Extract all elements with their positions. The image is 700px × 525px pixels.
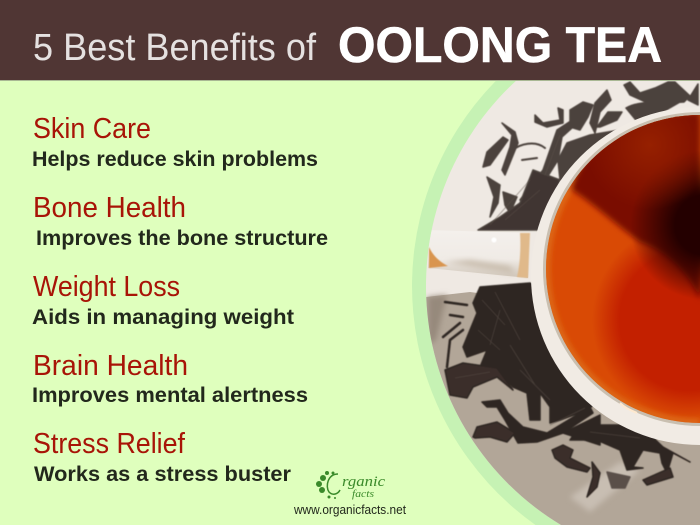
tea: red centre [598, 244, 700, 412]
inner wall shading [543, 112, 700, 426]
photo: tea cup on saucer with leaves [412, 81, 700, 525]
benefit: brain health: Brain Health [33, 350, 188, 382]
tea: upper glow [604, 116, 698, 202]
website url: www.organicfacts.net [293, 503, 406, 517]
benefit: weight loss: Aids in managing weight [32, 306, 294, 329]
benefit: weight loss [32, 271, 294, 329]
benefit: bone health: Improves the bone structure [36, 227, 328, 250]
tea: dark upper [572, 112, 700, 300]
header band [0, 0, 700, 81]
icon: leaf swirl [316, 471, 340, 499]
saucer ring [412, 81, 700, 525]
tea: darkest [630, 150, 700, 300]
saucer photo [420, 81, 700, 525]
benefit: skin care [32, 113, 318, 171]
benefit: weight loss: Weight Loss [33, 271, 180, 303]
benefit: stress relief: Works as a stress buster [34, 463, 291, 486]
benefit: bone health: Bone Health [33, 192, 186, 224]
title: 5 Best Benefits of: 5 Best Benefits of [33, 27, 316, 69]
benefit: stress relief [33, 428, 291, 486]
benefit: brain health: Improves mental alertness [32, 384, 308, 407]
tea: edge glow [547, 116, 700, 422]
handle [428, 230, 530, 278]
benefit: skin care: Helps reduce skin problems [32, 148, 318, 171]
logo word: facts: facts [352, 489, 374, 500]
rim highlight [620, 403, 637, 413]
leaves: lower cluster [443, 283, 690, 497]
title: OOLONG TEA: OOLONG TEA [338, 17, 662, 73]
benefit: bone health [33, 192, 328, 250]
logo: organic facts [293, 471, 406, 517]
cup rim [531, 107, 700, 445]
benefit: skin care: Skin Care [33, 113, 151, 145]
tea [540, 110, 700, 430]
benefit: brain health [32, 350, 308, 407]
leaves: upper cluster [478, 82, 698, 230]
leaf texture [456, 181, 640, 438]
logo word: Organic: rganic [342, 474, 385, 490]
benefit: stress relief: Stress Relief [33, 428, 186, 460]
